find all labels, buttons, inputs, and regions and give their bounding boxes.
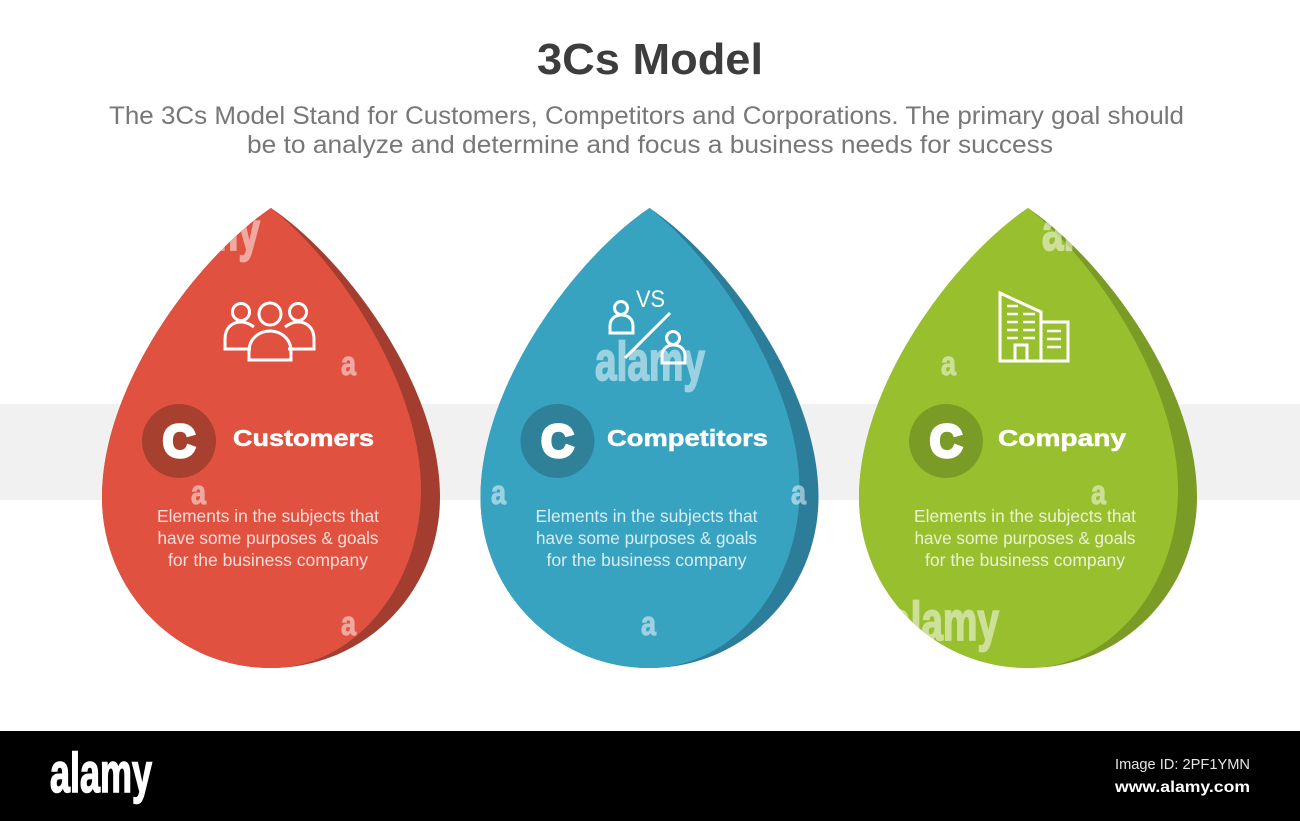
watermark fragments: company (900, 222, 1107, 652)
title: 3Cs Model (537, 35, 763, 84)
badge: C: C (541, 416, 574, 466)
description: customers: Elements in the subjects that (157, 506, 379, 526)
badge: C: C (163, 416, 195, 466)
watermark fragments: customers: a (341, 605, 357, 643)
description: customers: for the business company (168, 550, 368, 570)
icon: group of people (225, 303, 314, 360)
footer logo: alamy (50, 741, 152, 804)
description: company: for the business company (925, 550, 1125, 570)
watermark fragments: customers: alamy (150, 200, 260, 262)
panel: competitors drop (480, 208, 818, 668)
drop front: customers (102, 208, 421, 668)
watermark fragments: company: alamy (889, 590, 999, 652)
subtitle text: be to analyze and determine and focus a business needs for success (247, 131, 1053, 159)
drop front: competitors (480, 208, 800, 668)
watermark fragments: competitors: alamy (595, 330, 705, 392)
watermark fragments: customers: a (341, 345, 357, 383)
website: www.alamy.com (1114, 779, 1250, 796)
description: company (914, 506, 1136, 570)
description: competitors: have some purposes & goals (536, 528, 757, 548)
watermark fragments: customers: a (191, 474, 207, 512)
drop shadow side: customers (102, 208, 440, 668)
label: Customers: Customers (233, 425, 374, 451)
description: customers (157, 506, 379, 570)
icon: office buildings (1000, 293, 1068, 361)
subtitle text (109, 102, 1184, 159)
icon: person versus person (610, 286, 685, 363)
watermark fragments: competitors (491, 330, 807, 643)
panel: company drop (859, 200, 1197, 668)
description: company: have some purposes & goals (914, 528, 1136, 548)
watermark fragments: customers (191, 220, 357, 636)
description: competitors: Elements in the subjects that (536, 506, 758, 526)
label: Competitors: Competitors (607, 425, 768, 451)
description: company: Elements in the subjects that (914, 506, 1136, 526)
drop shadow side: competitors (480, 208, 818, 668)
badge: C: C (930, 416, 962, 466)
panel: customers drop (102, 200, 440, 668)
subtitle text: The 3Cs Model Stand for Customers, Competitors and Corporations. The primary goal should (109, 102, 1184, 130)
badge: C (909, 404, 983, 478)
watermark fragments: company: a (941, 345, 957, 383)
watermark fragments: competitors: a (791, 474, 807, 512)
background band (0, 404, 1300, 500)
description: competitors (536, 506, 758, 570)
watermark fragments: competitors: a (641, 605, 657, 643)
watermark fragments: company: a (1091, 474, 1107, 512)
description: customers: have some purposes & goals (158, 528, 379, 548)
description: competitors: for the business company (546, 550, 747, 570)
badge: C (142, 404, 216, 478)
icon: person versus person: VS (636, 286, 665, 313)
drop front: company (859, 208, 1178, 668)
drop shadow side: company (859, 208, 1197, 668)
badge: C (520, 404, 594, 478)
footer bar (0, 731, 1300, 821)
image id: Image ID: 2PF1YMN (1115, 756, 1250, 773)
watermark fragments: company: alamy (1042, 200, 1152, 262)
label: Company: Company (998, 425, 1126, 451)
watermark fragments: competitors: a (491, 474, 507, 512)
